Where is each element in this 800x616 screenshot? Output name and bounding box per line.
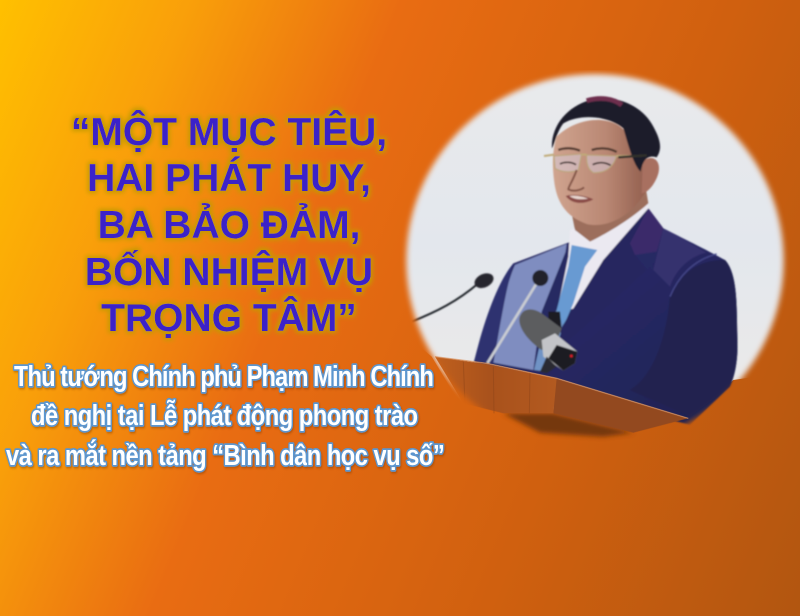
suit jacket (474, 208, 738, 425)
subtitle line 2: đề nghị tại Lễ phát động phong trào (31, 399, 418, 432)
subtitle line 3: và ra mắt nền tảng “Bình dân học vụ số” (6, 439, 445, 472)
heading line 4: BỐN NHIỆM VỤ (85, 249, 373, 294)
speaker figure (412, 98, 738, 425)
photo: speaker at podium in soft circle (400, 70, 800, 437)
subtitle line 1: Thủ tướng Chính phủ Phạm Minh Chính (14, 360, 434, 393)
necktie (557, 245, 597, 327)
right lapel (560, 208, 650, 334)
subtitle text block (6, 360, 445, 472)
photo backdrop (400, 70, 800, 417)
ear (642, 158, 659, 193)
eyeglasses (554, 154, 617, 173)
arm shading (632, 260, 738, 402)
far microphone (412, 270, 496, 322)
heading line 5: TRỌNG TÂM” (101, 296, 357, 340)
hair (552, 98, 660, 172)
face (553, 120, 650, 225)
neck (572, 191, 650, 242)
podium (435, 357, 688, 437)
heading line 1: “MỘT MỤC TIÊU, (71, 109, 387, 154)
nose and mouth (568, 170, 584, 191)
heading: quote (71, 109, 387, 340)
lit left side of jacket (493, 244, 567, 370)
near microphone (487, 270, 577, 373)
eyebrows (558, 148, 617, 152)
shirt (557, 203, 648, 313)
heading line 3: BA BẢO ĐẢM, (98, 203, 360, 247)
heading line 2: HAI PHÁT HUY, (87, 156, 371, 200)
